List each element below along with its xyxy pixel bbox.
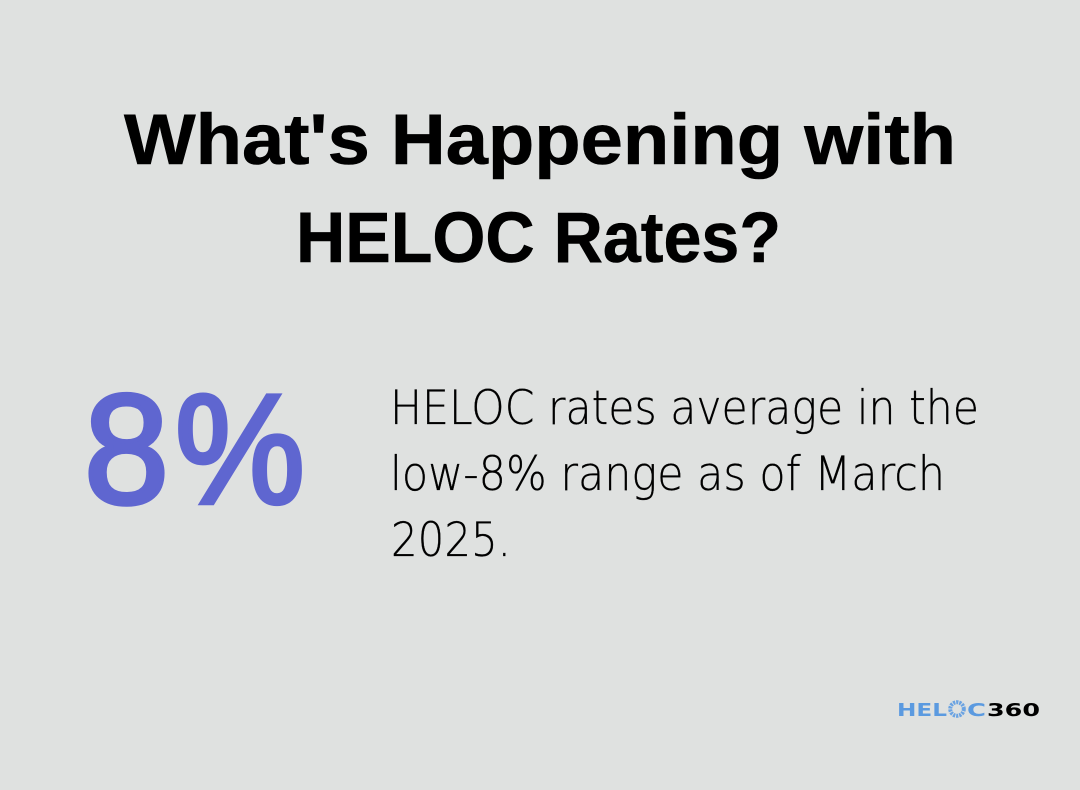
logo wordmark left: HEL xyxy=(897,700,947,721)
description text: low-8% range as of March xyxy=(390,447,945,502)
description text: HELOC rates average in the xyxy=(390,381,979,436)
logo wordmark 360: 360 xyxy=(987,700,1040,721)
big statistic: 8%: 8 xyxy=(84,363,169,537)
big statistic: 8%: % xyxy=(175,363,305,537)
title: HELOC Rates? xyxy=(296,199,781,278)
icon: logo swirl O xyxy=(950,702,964,716)
big statistic: 8% xyxy=(84,363,305,537)
title xyxy=(124,101,956,278)
description text: 2025. xyxy=(391,513,511,568)
logo wordmark C: C xyxy=(967,700,986,721)
description text xyxy=(390,381,979,568)
logo: HELOC360 xyxy=(897,700,1040,721)
title: What's Happening with xyxy=(124,101,956,180)
